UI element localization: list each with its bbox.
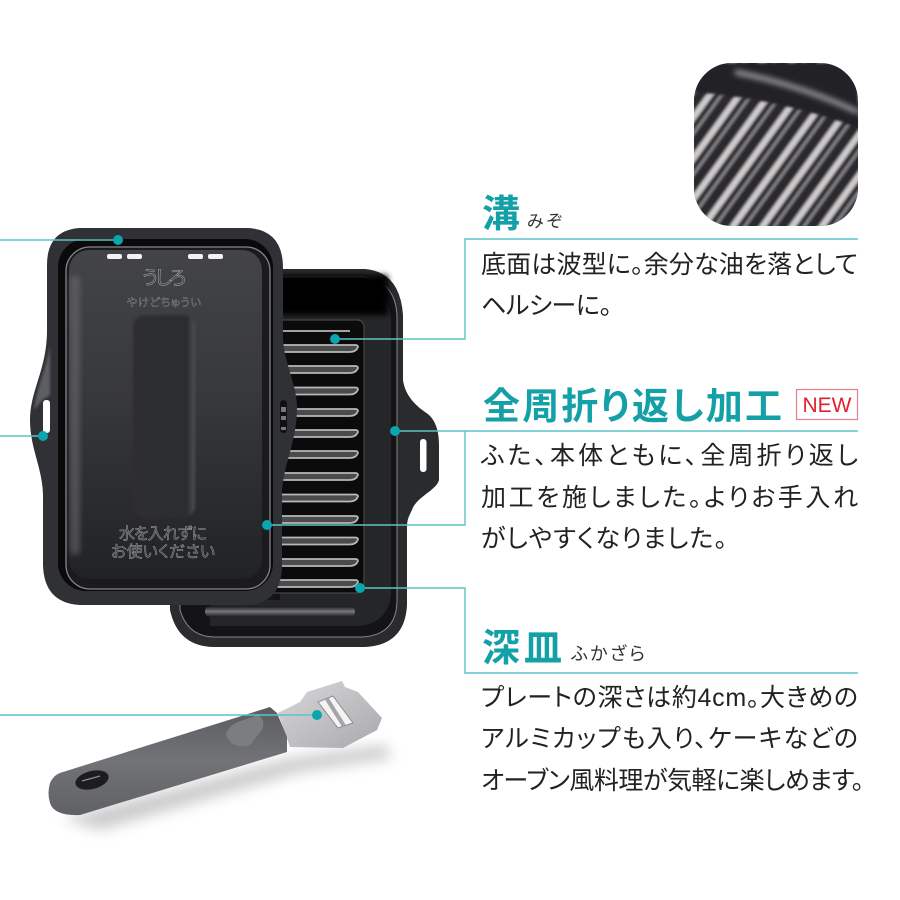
new badge <box>796 390 858 420</box>
body: groove: ヘルシーに。 <box>481 292 612 320</box>
handle grip <box>48 707 287 815</box>
handle shadow <box>62 745 392 830</box>
body: deep dish: アルミカップも入り、ケーキなどの <box>481 725 858 753</box>
section: groove <box>481 194 858 320</box>
plate handle slot <box>420 439 426 472</box>
handle metal plate <box>278 681 382 748</box>
callout dots <box>38 235 400 720</box>
body: full-edge folding: ふた、本体ともに、全周折り返し <box>481 442 858 470</box>
section: full-edge folding <box>481 386 858 553</box>
body: deep dish: プレートの深さは約4cm。大きめの <box>481 684 858 712</box>
handle <box>48 681 392 830</box>
reading: mizo: みぞ <box>527 212 562 231</box>
lid panel <box>69 250 262 579</box>
lid embossed text: burn caution: やけどちゅうい <box>127 296 201 309</box>
groove recess <box>240 320 364 593</box>
lid right slot <box>280 400 287 433</box>
thumbnail: groove close-up <box>694 63 858 226</box>
lid embossed text: use without water: 水を入れずに <box>119 525 207 543</box>
lid rim <box>66 247 270 589</box>
heading: full-edge folding: 全周折り返し加工 <box>483 386 782 427</box>
lid vents <box>107 254 223 259</box>
body: full-edge folding: がしやすくなりました。 <box>481 525 727 553</box>
leader lines <box>0 239 858 715</box>
lid embossed text: please use: お使いください <box>111 543 215 561</box>
heading: deep dish: 深皿 <box>482 628 562 670</box>
body: full-edge folding: 加工を施しました。よりお手入れ <box>481 484 858 512</box>
lid embossed text: rear: うしろ <box>142 268 186 289</box>
handle hang hole <box>73 767 111 793</box>
lid bulge highlight <box>34 345 50 410</box>
lid left highlight <box>70 275 80 555</box>
lid <box>30 228 297 605</box>
ribs <box>240 331 358 587</box>
lid left slot <box>43 400 50 433</box>
body: groove: 底面は波型に。余分な油を落として <box>481 251 858 279</box>
section: deep dish <box>481 628 864 795</box>
handle metal window <box>318 696 353 728</box>
plate inner well <box>180 277 397 637</box>
new badge: NEW <box>802 394 852 417</box>
bottom lip highlight <box>205 606 355 617</box>
lid recess <box>133 315 195 518</box>
lid inner channel <box>58 239 273 591</box>
plate body <box>170 269 439 647</box>
plate side wall <box>210 283 391 626</box>
heading: groove: 溝 <box>482 194 520 236</box>
handle thumb rest <box>226 715 263 746</box>
reading: fukazara: ふかざら <box>570 643 645 664</box>
body: deep dish: オーブン風料理が気軽に楽しめます。 <box>481 767 864 795</box>
